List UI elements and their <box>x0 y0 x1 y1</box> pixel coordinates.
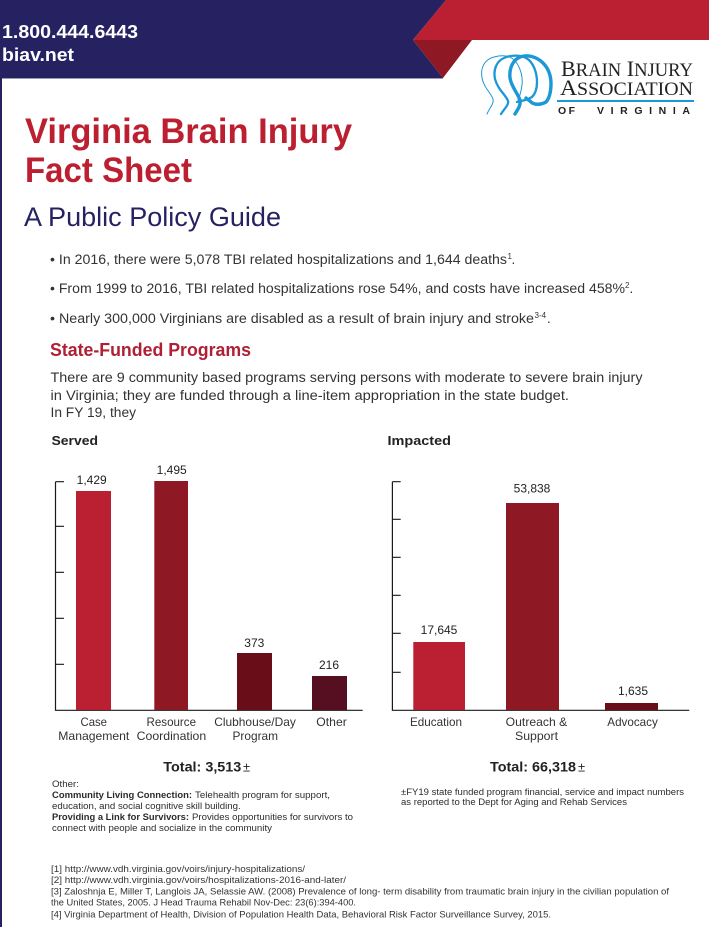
chart heading: Impacted: Impacted <box>388 433 451 448</box>
bar: Resource Coordination <box>137 463 206 743</box>
bar: Clubhouse/Day Program: 373 <box>244 636 265 650</box>
logo: Brain Injury Association of Virginia: BRAIN INJURY <box>561 56 693 81</box>
total: impacted: ± <box>578 760 585 775</box>
bar: Resource Coordination: 1,495 <box>157 463 187 477</box>
note: other programs: Community Living Connection: <box>52 790 192 801</box>
contact details: 1.800.444.6443 <box>2 22 138 42</box>
title: Fact Sheet <box>25 151 192 190</box>
key facts bullets <box>50 252 633 326</box>
icon: overlapping head outlines <box>482 56 551 114</box>
references <box>51 863 669 920</box>
references: [4] Virginia Department of Health, Division of Population Health Data, Behavioral Risk Factor Surveillance Survey, 2015. <box>51 909 551 920</box>
total: served: ± <box>243 760 250 775</box>
title <box>25 112 353 190</box>
key facts bullets: 1 <box>508 252 512 261</box>
bar: Education: Education <box>410 715 462 729</box>
references: [1] http://www.vdh.virginia.gov/voirs/injury-hospitalizations/ <box>51 863 305 874</box>
note: data source: as reported to the Dept for Aging and Rehab Services <box>401 797 627 808</box>
bar: Clubhouse/Day Program: Clubhouse/Day <box>214 715 296 729</box>
references: the United States, 2005. J Head Trauma Rehabil Nov-Dec: 23(6):394-400. <box>51 897 356 908</box>
note: other programs: Providing a Link for Survivors: <box>52 812 189 823</box>
note: data source <box>401 787 684 808</box>
bar: Other <box>312 658 347 729</box>
section heading: State-Funded Programs: State-Funded Programs <box>50 340 251 360</box>
bar: Other: Other <box>316 715 347 729</box>
note: other programs <box>52 779 353 834</box>
bar: Advocacy <box>605 684 658 729</box>
bar: Resource Coordination: Coordination <box>137 729 206 743</box>
bar: Case Management: 1,429 <box>77 473 107 487</box>
contact details: biav.net <box>2 45 74 65</box>
key facts bullets: 2 <box>625 281 630 290</box>
bar: Outreach and Support: Support <box>515 729 559 743</box>
note: other programs: Telehealth program for support, <box>195 790 330 801</box>
logo: Brain Injury Association of Virginia: OF <box>558 105 576 117</box>
bar: Clubhouse/Day Program <box>214 636 296 743</box>
bar: Clubhouse/Day Program: Program <box>232 729 278 743</box>
key facts bullets: • From 1999 to 2016, TBI related hospitalizations rose 54%, and costs have increased 458% <box>50 281 625 296</box>
key facts bullets: • Nearly 300,000 Virginians are disabled as a result of brain injury and stroke <box>50 311 534 326</box>
bar: Case Management <box>58 473 130 743</box>
logo: Brain Injury Association of Virginia: ASSOCIATION <box>560 75 693 100</box>
total: served: Total: 3,513 <box>163 759 242 775</box>
references: [2] http://www.vdh.virginia.gov/voirs/hospitalizations-2016-and-later/ <box>51 874 346 885</box>
key facts bullets: 3-4 <box>534 311 547 320</box>
note: data source: ±FY19 state funded program financial, service and impact numbers <box>401 787 684 798</box>
bar chart: Impacted <box>388 433 689 743</box>
references: [3] Zaloshnja E, Miller T, Langlois JA, Selassie AW. (2008) Prevalence of long- term disability from traumatic brain injury in the civilian population of <box>51 886 669 897</box>
contact details <box>2 22 138 65</box>
bar: Case Management: Case <box>80 715 107 729</box>
bar: Outreach and Support <box>506 482 567 743</box>
programs paragraph: in Virginia; they are funded through a line-item appropriation in the state budget. <box>50 388 569 403</box>
bar: Other: 216 <box>319 658 339 672</box>
programs paragraph: In FY 19, they <box>50 405 136 420</box>
bar chart: Served <box>52 433 363 743</box>
bar: Outreach and Support: 53,838 <box>514 482 551 496</box>
note: other programs: education, and social cognitive skill building. <box>52 801 241 812</box>
note: other programs: connect with people and socialize in the community <box>52 823 272 834</box>
bar: Education: 17,645 <box>421 623 458 637</box>
note: other programs: Provides opportunities for survivors to <box>192 812 353 823</box>
key facts bullets: . <box>547 311 551 326</box>
bar: Resource Coordination: Resource <box>146 715 196 729</box>
programs paragraph <box>50 370 643 420</box>
logo: Brain Injury Association of Virginia: VIRGINIA <box>597 105 690 117</box>
key facts bullets: . <box>512 252 515 267</box>
bar: Advocacy: Advocacy <box>607 715 658 729</box>
chart heading: Served: Served <box>52 433 98 448</box>
bar: Education <box>410 623 465 729</box>
bar: Outreach and Support: Outreach & <box>506 715 567 729</box>
subtitle: A Public Policy Guide <box>24 202 281 232</box>
logo: Brain Injury Association of Virginia <box>482 56 694 117</box>
key facts bullets: . <box>630 281 633 296</box>
bar: Advocacy: 1,635 <box>618 684 648 698</box>
title: Virginia Brain Injury <box>25 112 353 151</box>
key facts bullets: • In 2016, there were 5,078 TBI related hospitalizations and 1,644 deaths <box>50 252 507 267</box>
bar: Case Management: Management <box>58 729 130 743</box>
total: impacted: Total: 66,318 <box>490 759 576 775</box>
programs paragraph: There are 9 community based programs serving persons with moderate to severe brain injury <box>50 370 643 385</box>
note: other programs: Other: <box>52 779 79 790</box>
